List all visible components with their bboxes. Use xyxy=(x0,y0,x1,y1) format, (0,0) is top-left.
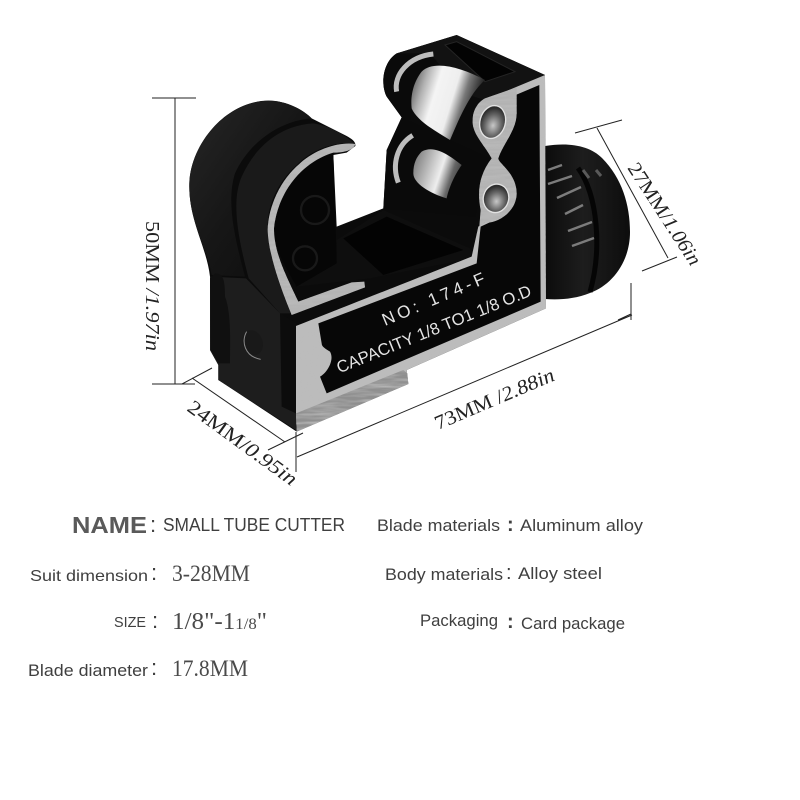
spec: suit dimension: : xyxy=(151,560,157,585)
upper roller steel xyxy=(411,66,485,140)
spec: packaging xyxy=(420,611,625,633)
spec: packaging: Packaging xyxy=(420,612,498,630)
top slot xyxy=(445,42,515,82)
dimension: knob diameter xyxy=(575,120,706,271)
rear wheel hood xyxy=(189,101,312,277)
spec: blade materials: Aluminum alloy xyxy=(520,516,644,535)
spec: name: SMALL TUBE CUTTER xyxy=(163,515,345,535)
black label plate xyxy=(318,85,541,393)
spec: size: : xyxy=(152,608,158,633)
metal arc band xyxy=(268,144,365,315)
dimension: length xyxy=(296,283,632,472)
spec: name xyxy=(72,512,345,538)
dimension: height xyxy=(141,98,196,384)
spec: body materials xyxy=(385,562,602,584)
lower roller housing xyxy=(383,117,490,217)
lower roller ring xyxy=(395,135,413,183)
dimension: depth xyxy=(182,368,303,490)
spec: blade materials: Blade materials xyxy=(377,516,500,535)
inner arm shadow xyxy=(274,153,337,287)
lower side block xyxy=(210,277,296,430)
front hood shoulder xyxy=(236,123,354,313)
spec: size: 1/8"-11/8" xyxy=(172,609,267,635)
pin plate xyxy=(473,87,517,227)
lower roller steel xyxy=(413,149,462,198)
spec: name: NAME xyxy=(72,512,147,538)
plate text: model: NO: 174-F xyxy=(379,268,488,330)
dimension: knob diameter: 27MM/1.06in xyxy=(623,159,706,270)
dark floor xyxy=(343,217,463,275)
tube cutter tool xyxy=(189,35,546,432)
dimension: depth: 24MM/0.95in xyxy=(183,396,301,490)
dimension: height: 50MM /1.97in xyxy=(141,221,163,351)
metal face plate xyxy=(296,75,546,432)
spec: body materials: : xyxy=(506,562,512,584)
spec: packaging: Card package xyxy=(521,614,625,633)
spec: blade materials xyxy=(377,514,644,536)
plate text: capacity: CAPACITY 1/8 TO1 1/8 O.D xyxy=(334,281,534,377)
icon: adjusting knob xyxy=(545,144,630,299)
inner bolt xyxy=(293,196,329,270)
upper roller ring xyxy=(396,54,433,92)
top frame xyxy=(397,35,545,100)
spec: suit dimension: 3-28MM xyxy=(172,561,250,586)
spec: body materials: Alloy steel xyxy=(518,564,602,583)
spec: packaging: : xyxy=(507,611,514,633)
spec: suit dimension: Suit dimension xyxy=(30,568,148,585)
side rivet xyxy=(239,327,266,359)
spec: blade diameter: 17.8MM xyxy=(172,656,248,681)
spec: blade diameter xyxy=(28,655,248,681)
spec: blade materials: : xyxy=(507,514,514,536)
spec: blade diameter: : xyxy=(151,655,157,680)
tool black silhouette xyxy=(189,35,546,432)
spec: size: SIZE xyxy=(114,614,146,631)
dimension: length: 73MM /2.88in xyxy=(431,364,558,435)
lower pin xyxy=(480,181,512,215)
side notch xyxy=(210,273,230,363)
upper roller end cap xyxy=(383,53,437,120)
spec: body materials: Body materials xyxy=(385,565,503,584)
spec: blade diameter: Blade diameter xyxy=(28,662,149,680)
front corner strip xyxy=(280,313,297,413)
metal lower lip xyxy=(296,370,408,432)
spec: name: : xyxy=(150,512,156,537)
upper pin xyxy=(476,103,509,141)
spec: suit dimension xyxy=(30,560,250,586)
floor ledge xyxy=(297,210,472,287)
spec: size xyxy=(114,608,267,635)
